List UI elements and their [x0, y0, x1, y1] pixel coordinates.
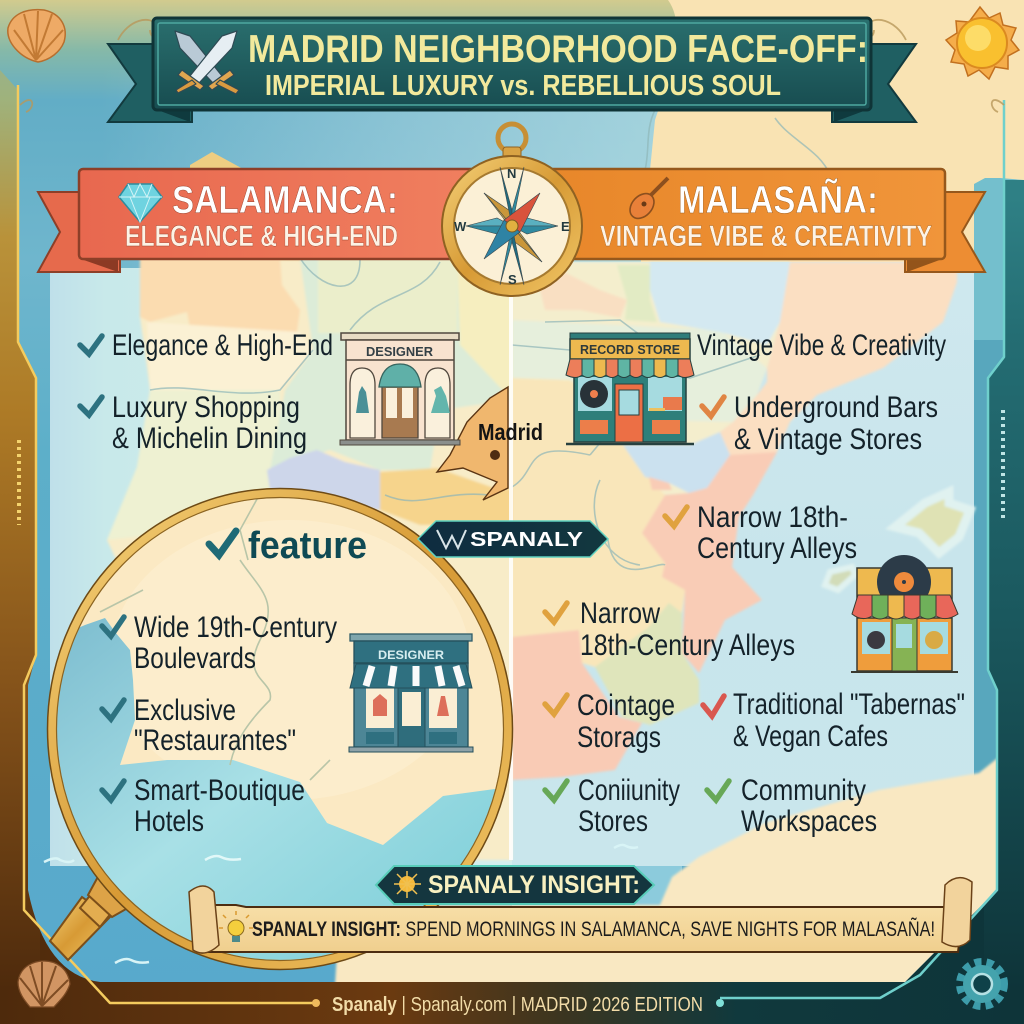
check item: Cointage [545, 689, 675, 754]
compass ring [498, 124, 526, 152]
check item: Community: Workspaces [741, 805, 877, 838]
Malasana subheading: VINTAGE VIBE & CREATIVITY [600, 220, 932, 253]
panel sea [50, 268, 512, 866]
check item: Luxury: & Michelin Dining [112, 422, 307, 455]
check item: Narrow alleys one: Narrow 18th- [697, 501, 848, 534]
check item: Hotels [102, 774, 305, 838]
compass letters: E [561, 219, 570, 234]
east cream [512, 378, 685, 667]
panel: Malasana banner [548, 169, 985, 272]
Madrid label: Madrid [478, 419, 543, 445]
check item: Elegance [80, 329, 333, 362]
left scroll roll [189, 886, 219, 953]
badge text: SPANALY [470, 529, 584, 551]
Madrid marker [490, 450, 500, 460]
title banner [108, 18, 916, 122]
check item: Cointage: Cointage [577, 689, 675, 722]
check item: Tabernas: & Vegan Cafes [733, 720, 888, 753]
check item: Narrow alleys two [545, 597, 795, 662]
pink valencia [642, 452, 777, 673]
east pale band [512, 320, 767, 422]
north-west peach [140, 258, 300, 332]
icon: designer store [340, 333, 460, 445]
check item: Hotels: Smart-Boutique [134, 774, 305, 807]
Spanaly badge [418, 521, 608, 557]
eastern sea strip [974, 340, 1004, 770]
check item: Coniiunity [545, 774, 680, 838]
pale west [107, 390, 285, 540]
blue purple region [267, 450, 380, 510]
check item: Restaurantes: "Restaurantes" [134, 724, 296, 757]
gold region [380, 468, 512, 525]
icon: small sun [394, 871, 421, 898]
right list upper [545, 329, 965, 838]
compass letters: N [507, 166, 516, 181]
check item: Boulevards: Boulevards [134, 642, 256, 675]
compass star [466, 167, 558, 285]
check item: Boulevards: Wide 19th-Century [134, 611, 337, 644]
check item: Restaurantes [102, 694, 296, 757]
record store sign: RECORD STORE [580, 342, 680, 357]
icon: record store [566, 333, 694, 444]
striped awning [350, 664, 472, 688]
lens store sign: DESIGNER [378, 648, 444, 662]
check item: Narrow alleys one [665, 501, 857, 565]
gulf [623, 432, 730, 493]
wave marks [44, 845, 638, 963]
Malasana heading: MALASAÑA: [678, 178, 878, 222]
awning stripes [852, 595, 958, 619]
icon: bottom shell [18, 961, 70, 1007]
check item: Narrow alleys two: Narrow [580, 597, 660, 630]
icon: guitar [625, 178, 668, 223]
compass letters [454, 166, 570, 287]
inland blue [650, 262, 790, 345]
north-east sea corner [974, 178, 1024, 340]
icon: top shell [8, 10, 65, 62]
check item: Narrow alleys one: Century Alleys [697, 532, 857, 565]
check item: Tabernas: Traditional "Tabernas" [733, 688, 965, 721]
vertical divider [509, 296, 513, 860]
check item: Luxury: Luxury Shopping [112, 391, 300, 424]
check item: Hotels: Hotels [134, 805, 204, 838]
icon: gear [960, 962, 1004, 1006]
ribbon tails [108, 44, 192, 122]
lens map [50, 490, 510, 975]
left list [80, 329, 333, 455]
scroll banner [189, 878, 972, 953]
awning [566, 359, 694, 378]
icon: crest [437, 530, 466, 548]
panel: magnifier lens [48, 488, 512, 975]
text: Vintage Vibe: Vintage Vibe & Creativity [697, 329, 946, 362]
panel: Salamanca banner [38, 169, 479, 272]
province lines [150, 110, 830, 569]
Salamanca heading: SALAMANCA: [172, 179, 398, 222]
title text: MADRID NEIGHBORHOOD FACE-OFF: [248, 28, 868, 71]
ibiza [825, 567, 855, 590]
africa [335, 756, 1000, 985]
lens text [102, 525, 367, 838]
iberia land west [107, 258, 512, 860]
store sign: DESIGNER [366, 344, 434, 359]
icon: crossed swords [175, 31, 239, 94]
subtitle text: IMPERIAL LUXURY vs. REBELLIOUS SOUL [265, 70, 781, 102]
icon: compass [442, 124, 582, 296]
icon: lightbulb [219, 911, 253, 942]
check item: Restaurantes: Exclusive [134, 694, 236, 727]
check item: Tabernas [703, 688, 965, 753]
icon: lens designer store [349, 634, 473, 752]
check item: Narrow alleys two: 18th-Century Alleys [580, 629, 795, 662]
Madrid region [437, 387, 543, 500]
badge heading: SPANALY INSIGHT: [428, 871, 640, 899]
mallorca [895, 492, 970, 553]
northern coast tip [190, 152, 300, 270]
pale green centre [270, 258, 512, 470]
check item: Underground: Underground Bars [734, 391, 938, 424]
check item: Underground: & Vintage Stores [734, 423, 922, 456]
right scroll roll [942, 878, 972, 947]
check item: Boulevards [102, 611, 337, 675]
yellow centre [457, 272, 509, 396]
check item: Luxury [80, 391, 307, 455]
Salamanca subheading: ELEGANCE & HIGH-END [125, 220, 398, 253]
check item: Underground [702, 391, 938, 456]
icon: diamond [119, 184, 162, 222]
feature heading: feature [248, 525, 367, 567]
compass letters: S [508, 272, 517, 287]
icon: sun [946, 7, 1019, 79]
green murcia [595, 603, 699, 725]
lower sea [512, 866, 682, 906]
insight badge [376, 866, 654, 904]
icon: vinyl shop [851, 555, 958, 672]
lens handle [50, 873, 133, 960]
check item: Elegance: Elegance & High-End [112, 329, 333, 362]
north green [617, 265, 657, 322]
check item: Community: Community [741, 774, 866, 807]
pink andalusia [512, 630, 642, 780]
small pink [649, 477, 672, 490]
east land [512, 262, 790, 667]
north-east peach [720, 262, 958, 456]
cream centre west [147, 322, 313, 390]
north peach [540, 273, 626, 318]
map regions [107, 258, 1000, 985]
check item: Community [707, 774, 877, 838]
footer text: Spanaly | Spanaly.com | MADRID 2026 EDITION [332, 994, 703, 1016]
check item: Coniiunity: Coniiunity [578, 774, 680, 807]
compass letters: W [454, 219, 467, 234]
northern land [640, 0, 1024, 270]
check item: Coniiunity: Stores [578, 805, 648, 838]
check item: Cointage: Storags [577, 721, 661, 754]
